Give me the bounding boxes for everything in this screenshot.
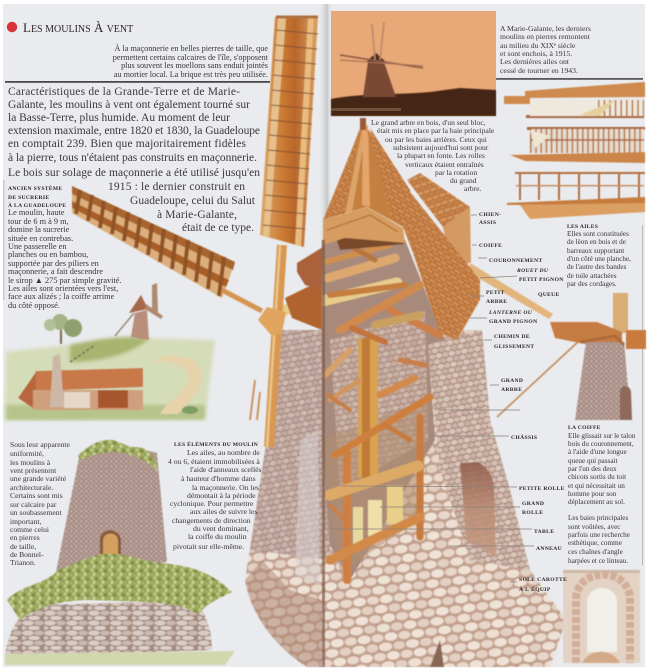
text block: les ailes: par des cordages. xyxy=(567,280,617,288)
text block: les éléments du moulin: démontait à la période xyxy=(187,491,256,500)
text block: la coiffe: chicots sortis du toit xyxy=(568,473,626,481)
horizontal rule right xyxy=(496,78,643,80)
labels: PETIT xyxy=(486,290,505,296)
labels: ARBRE xyxy=(486,299,507,305)
text block: la coiffe: bois du couronnement, xyxy=(568,440,634,448)
text block: ancien système de sucrerie: Les ailes sont orientées vers l'est, xyxy=(8,284,118,293)
rolling cylinders xyxy=(353,486,403,549)
text block: ancien système de sucrerie: Une passerelle en xyxy=(8,242,67,251)
main body text: était de ce type. xyxy=(182,222,254,234)
text block: sous leur apparente uniformité: un soubassement xyxy=(10,508,63,517)
text block: ancien système de sucrerie: tour de 6 m à 9 m, xyxy=(8,217,69,226)
sail: top xyxy=(260,17,318,247)
labels xyxy=(479,212,567,593)
text block: le grand arbre: arbre. xyxy=(464,184,481,193)
text block: les éléments du moulin xyxy=(168,440,262,551)
illustration: sail details xyxy=(504,82,645,219)
text block: la coiffe: homme pour son xyxy=(568,490,617,498)
sail: left xyxy=(72,186,262,311)
text block: le grand arbre: ou par les baies arrières. Ceux qui xyxy=(385,135,487,144)
text block: sous leur apparente uniformité: Trianon. xyxy=(10,558,36,567)
text block: ancien système de sucrerie: ANCIEN SYSTÈME xyxy=(8,184,62,192)
text block: sous leur apparente uniformité: important, xyxy=(10,517,42,526)
main body text xyxy=(8,86,260,234)
main body text: extension maximale, entre 1820 et 1830, la Guadeloupe xyxy=(8,125,260,137)
callout labels with leader lines xyxy=(330,212,567,593)
text block: sous leur apparente uniformité: sur calcaire par xyxy=(10,500,57,509)
text block: à Marie-Galante: au milieu du XIXᵉ siècle xyxy=(500,41,576,50)
text block: les éléments du moulin: Les ailes, au nombre de xyxy=(187,448,260,457)
text block: les éléments du moulin: la coiffe du moulin xyxy=(188,532,247,541)
text block: les ailes xyxy=(567,224,631,288)
main body text: la Basse-Terre, plus humide. Au moment de leur xyxy=(8,112,230,124)
text block: les éléments du moulin: LES ÉLÉMENTS DU MOULIN xyxy=(174,440,258,448)
text block: la coiffe: et qui nécessitait un xyxy=(568,482,625,490)
text block: les bases principales: parfois une recherche xyxy=(568,531,630,539)
main body text: Caractéristiques de la Grande-Terre et de Marie- xyxy=(8,86,240,98)
labels: CHÂSSIS xyxy=(511,433,537,441)
labels: GRAND xyxy=(522,501,544,507)
text block: sous leur apparente uniformité: de taille, xyxy=(10,542,36,551)
text block: les bases principales: ces chaînes d'angle xyxy=(568,548,623,556)
text block: le grand arbre: la plupart en fonte. Les rolles xyxy=(397,151,485,160)
text block: les ailes: de l'autre des bandes xyxy=(567,263,627,271)
sail detail 1 xyxy=(504,82,645,118)
text block: sous leur apparente uniformité: architecturale. xyxy=(10,483,53,492)
text block: masonry intro: À la maçonnerie en belles pierres de taille, que xyxy=(115,43,268,53)
text block: les ailes: d'un côté une planche, xyxy=(567,255,631,263)
sail detail 3 xyxy=(507,172,645,219)
labels: QUEUE xyxy=(538,292,560,298)
windmill cap: shingled cone xyxy=(323,118,410,227)
text block: les ailes: de lèon en bois et de xyxy=(567,238,626,246)
distant windmill xyxy=(115,283,163,340)
labels: ARBRE xyxy=(501,387,522,393)
text block: la coiffe: à l'aide d'une longue xyxy=(568,448,627,456)
illustration: sugar estate landscape xyxy=(5,283,215,420)
text block: sous leur apparente uniformité: les moulins à xyxy=(10,458,51,467)
labels: ROLLE xyxy=(522,510,543,516)
text block: les éléments du moulin: la maçonnerie. On les xyxy=(192,483,259,492)
sail detail 2 xyxy=(510,127,645,163)
text block: les éléments du moulin: du vent dominant, xyxy=(193,524,249,533)
text block: masonry intro: permettent certains calcaires de l'île, s'opposent xyxy=(113,53,269,62)
rocky base xyxy=(5,600,212,656)
labels: SOLE CAROTTE xyxy=(519,577,567,583)
ground and hills xyxy=(5,337,215,420)
text block: ancien système de sucrerie: le sirop ▲ 275 par simple gravité. xyxy=(8,276,122,285)
text block: ancien système de sucrerie: DE SUCRERIE xyxy=(8,195,49,201)
text block: le grand arbre: du grand xyxy=(450,176,477,185)
labels: PETIT PIGNON xyxy=(519,277,564,283)
text block: ancien système de sucrerie: À LA GUADELOUPE xyxy=(8,201,66,209)
sugar works xyxy=(18,345,198,414)
text block: sous leur apparente uniformité: comme celui xyxy=(10,525,49,534)
tower xyxy=(55,448,167,577)
text block: le grand arbre: Le grand arbre en bois, d'un seul bloc, xyxy=(371,118,486,127)
windmill cap: front gable xyxy=(323,207,405,245)
text block: ancien système de sucrerie: située en contrebas. xyxy=(8,234,73,243)
illustration: ruined tower with vegetation xyxy=(5,440,235,665)
text block: les éléments du moulin: cyclonique. Pour permettre xyxy=(170,499,254,508)
text block: sous leur apparente uniformité: une grande variété xyxy=(10,474,67,483)
text block: sous leur apparente uniformité: de Bonnel- xyxy=(10,550,44,559)
text block: la coiffe: LA COIFFE xyxy=(568,425,601,431)
main body text: Galante, les moulins à vent ont également tourné sur xyxy=(8,99,250,111)
text block: à Marie-Galante: A Marie-Galante, les derniers xyxy=(500,24,591,33)
text block: masonry intro xyxy=(113,43,269,79)
main body text: à Marie-Galante, xyxy=(157,209,237,221)
labels: GRAND xyxy=(501,378,523,384)
text block: les bases principales: esthétique, comme xyxy=(568,539,622,547)
text block: les ailes: barreaux supportant xyxy=(567,247,624,255)
wooden mast, ladder and hub xyxy=(250,245,323,447)
labels: ANNEAU xyxy=(536,546,562,552)
text block: ancien système de sucrerie: maçonnerie, a fait descendre xyxy=(8,267,103,276)
text block: la coiffe: par l'un des deux xyxy=(568,465,617,473)
text block: à Marie-Galante: Les dernières ailes ont xyxy=(500,57,570,66)
text block: sous leur apparente uniformité: Sous leur apparente xyxy=(10,440,71,449)
text block: les ailes: de toile attachées xyxy=(567,272,617,280)
labels: PETITE ROLLE xyxy=(519,486,565,492)
text block: à Marie-Galante xyxy=(500,24,591,75)
text block: sous leur apparente uniformité: uniformité, xyxy=(10,449,44,458)
text block: les éléments du moulin: changements de direction xyxy=(172,516,251,525)
text block: ancien système de sucrerie: Le moulin, haute xyxy=(8,208,65,217)
text block: masonry intro: au mortier local. La brique est très peu utilisée. xyxy=(114,70,268,79)
labels: TABLE xyxy=(534,529,554,535)
labels: CHIEN- xyxy=(479,212,501,218)
text block: la coiffe: déplacement au sol. xyxy=(568,498,625,506)
windmill cap: shingled band xyxy=(366,128,480,340)
text block: ancien système de sucrerie: du côté opposé. xyxy=(8,301,60,310)
text block: la coiffe xyxy=(568,425,636,506)
text block: les éléments du moulin: à hauteur d'homme dans xyxy=(181,474,256,483)
text block: la coiffe: Elle glissait sur le talon xyxy=(568,432,636,440)
labels: GLISSEMENT xyxy=(494,344,534,350)
windmill tower: stone walls xyxy=(245,330,566,667)
door xyxy=(100,530,121,555)
text block: à Marie-Galante: moulins en pierres remontent xyxy=(500,32,591,41)
text block: les bases principales: harpées et ce linteau. xyxy=(568,557,628,565)
labels: LANTERNE OU xyxy=(488,310,533,316)
text block: le grand arbre: subsistent aujourd'hui sont pour xyxy=(393,143,489,152)
tower xyxy=(575,342,631,420)
green bush xyxy=(7,554,232,620)
labels: GRAND PIGNON xyxy=(489,319,537,325)
main body text: Le bois sur solage de maçonnerie a été utilisé jusqu'en xyxy=(8,167,260,179)
text block: sous leur apparente uniformité: Certains sont mis xyxy=(10,491,63,500)
text block: ancien système de sucrerie: supportée par des piliers en xyxy=(8,259,100,268)
main body text: Guadeloupe, celui du Salut xyxy=(130,195,256,207)
vegetation crown xyxy=(78,440,158,472)
labels: COIFFE xyxy=(479,243,502,249)
book spine shadow across the illustration xyxy=(322,240,325,667)
text block: le grand arbre: était mis en place par la baie principale xyxy=(377,126,495,135)
text block: ancien système de sucrerie: face aux alizés ; la coiffe arrime xyxy=(8,292,115,301)
text block: la coiffe: queue qui passait xyxy=(568,457,618,465)
text block: les bases principales: Les baies principales xyxy=(568,514,628,522)
photo: old windmill in sepia xyxy=(331,11,496,116)
tail beam and brace of the windmill xyxy=(468,263,580,417)
labels: CHEMIN DE xyxy=(494,334,530,340)
main body text: 1915 : le dernier construit en xyxy=(108,181,245,193)
text block: les éléments du moulin: l'aide d'anneaux scellés xyxy=(190,465,262,474)
text block: sous leur apparente uniformité: vent présentent xyxy=(10,466,57,475)
leader lines xyxy=(330,215,534,582)
text block: les ailes: LES AILES xyxy=(567,224,598,230)
small side view windmill xyxy=(550,293,646,420)
text block: ancien système de sucrerie: domine la sucrerie xyxy=(8,225,70,234)
text block: les éléments du moulin: pivotait sur elle-même. xyxy=(173,542,244,551)
text block: le grand arbre xyxy=(371,118,495,193)
sails xyxy=(550,293,646,349)
text block: les éléments du moulin: 4 ou 6, étaient immobilisées à xyxy=(168,457,260,466)
structural beams xyxy=(285,240,440,580)
text block: les ailes: Elles sont constituées xyxy=(567,230,629,238)
text block: sous leur apparente uniformité: en pierres xyxy=(10,533,40,542)
windmill cap: dormer and wall xyxy=(407,173,471,272)
text block: à Marie-Galante: et sont enchois, à 1915. xyxy=(500,49,572,58)
illustration: stone arch doorway xyxy=(563,570,640,663)
text block: à Marie-Galante: cessé de tourner en 1943. xyxy=(500,66,578,75)
text block: ancien système de sucrerie xyxy=(8,184,122,310)
text block: le grand arbre: par la rotation xyxy=(435,168,477,177)
text block: ancien système de sucrerie: planches ou en bambou, xyxy=(8,250,88,259)
windmill cutaway interior xyxy=(285,235,445,580)
heading: les moulins à vent: LES MOULINS À VENT xyxy=(23,20,133,35)
text block: masonry intro: plus souvent les moellons sans enduit jointés xyxy=(121,61,268,70)
labels: ASSIS xyxy=(479,220,496,226)
grand arbre xyxy=(358,338,378,478)
labels: À L'ÉQUIP xyxy=(519,585,551,593)
text block: le grand arbre: verticaux étaient entraînés xyxy=(405,160,484,169)
horizontal rule left xyxy=(5,81,270,83)
text block: les bases principales xyxy=(568,514,630,565)
text block: les bases principales: sont voûtées, avec xyxy=(568,523,620,531)
text block: les éléments du moulin: aux ailes de suivre les xyxy=(190,507,257,516)
main body text: en comptait 239. Bien que majoritairement fidèles xyxy=(8,138,247,150)
labels: COURONNEMENT xyxy=(489,258,543,264)
labels: ROUET DU xyxy=(516,268,549,274)
trees xyxy=(44,314,82,344)
main body text: à la pierre, tous n'étaient pas construits en maçonnerie. xyxy=(8,152,257,164)
text block: sous leur apparente uniformité xyxy=(10,440,71,567)
